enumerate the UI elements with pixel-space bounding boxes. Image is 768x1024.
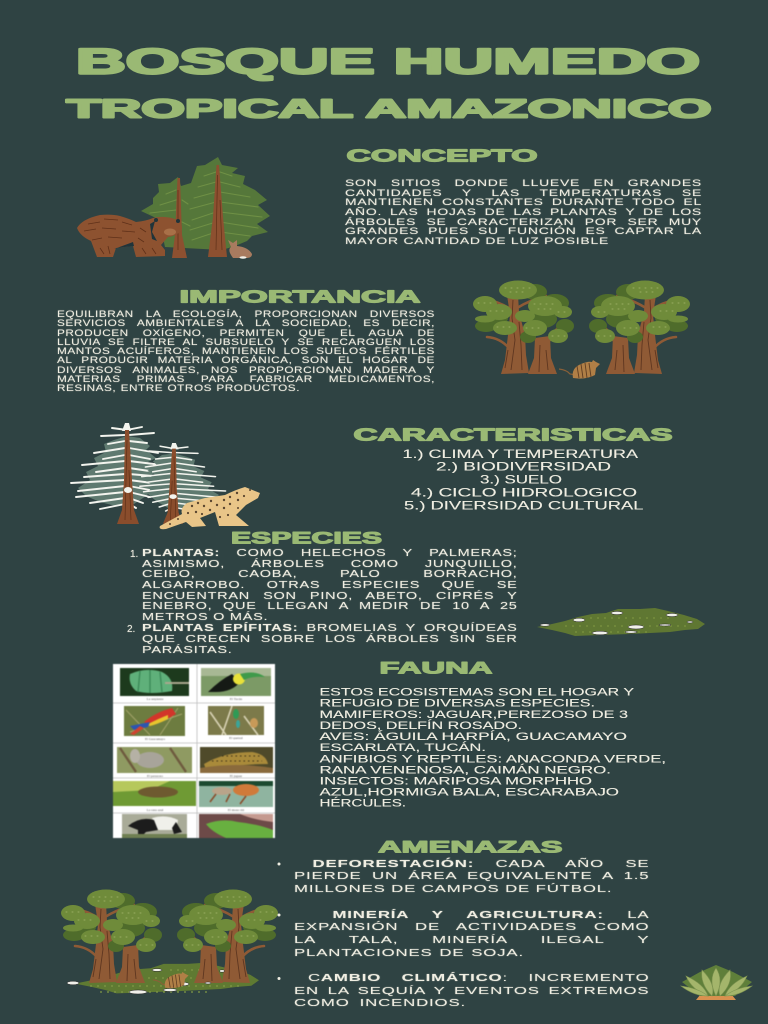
text: amenaza cambio climatico: CAMBIO CLIMÁTICO: INCREMENTO: [308, 973, 649, 984]
text: amenaza deforestacion: PIERDE UN ÁREA EQUIVALENTE A 1.5: [294, 871, 649, 882]
list: caracteristicas: 3.) SUELO: [480, 473, 562, 487]
photo: quetzal: El quetzal: [229, 736, 243, 740]
text: especies item 1: ENCUENTRAN SON PINO, ABETO, CIPRÉS Y: [142, 591, 517, 602]
photo: monkey: [199, 781, 273, 812]
title: BOSQUE HUMEDO: BOSQUE HUMEDO: [76, 42, 700, 82]
text: fauna description: RANA VENENOSA, CAIMÁN NEGRO.: [320, 763, 611, 776]
photo: toucan: El Tucán: [230, 697, 242, 701]
text: fauna description: REFUGIO DE DIVERSAS ESPECIES.: [320, 698, 595, 710]
icon: snowy pines with jaguar: [71, 423, 260, 529]
heading: especies: ESPECIES: [231, 530, 382, 548]
photo: tapir: [122, 814, 187, 838]
text: especies item 1: [142, 548, 517, 623]
list: caracteristicas: 1.) CLIMA Y TEMPERATURA: [402, 447, 638, 461]
text: concepto paragraph: GRANDES PUES SU FUNCIÓN ES CAPTAR LA: [345, 226, 702, 236]
text: amenaza mineria: MINERÍA Y AGRICULTURA: LA: [332, 910, 649, 920]
text: especies item 1: PLANTAS: COMO HELECHOS Y PALMERAS;: [142, 548, 517, 559]
text: concepto paragraph: AÑO. LAS HOJAS DE LAS PLANTAS Y DE LOS: [345, 207, 702, 217]
text: amenaza mineria: PLANTACIONES DE SOJA.: [294, 948, 524, 959]
text: fauna description: INSECTOS: MARIPOSA MORPHHO: [320, 776, 593, 788]
text: importancia paragraph: EQUILIBRAN LA ECOLOGÍA, PROPORCIONAN DIVERSOS: [57, 309, 435, 319]
text: especies item 2: PARÁSITAS.: [142, 645, 232, 656]
list number 1: 1.: [130, 549, 138, 560]
text: especies item 1: ALGARROBO. OTRAS ESPECIES QUE SE: [142, 580, 517, 591]
photo: macaw: El Guacamayo: [145, 737, 165, 741]
icon: broadleaf trees with armadillo: [473, 280, 690, 379]
text: fauna description: MAMIFEROS: JAGUAR,PEREZOSO DE 3: [320, 709, 628, 721]
text: importancia paragraph: RESINAS, ENTRE OTROS PRODUCTOS.: [57, 383, 300, 393]
photo: caterpillar: [120, 668, 189, 701]
text: fauna description: AZUL,HORMIGA BALA, ESCARABAJO: [320, 787, 620, 799]
text: fauna description: HÉRCULES.: [320, 797, 406, 810]
text: concepto paragraph: [344, 178, 702, 246]
photo: sloth: El perezoso: [147, 774, 163, 778]
text: importancia paragraph: MANTOS ACUÍFEROS, MANTIENEN LOS SUELOS FÉRTILES: [57, 346, 435, 356]
text: fauna description: ANFIBIOS Y REPTILES: ANACONDA VERDE,: [320, 753, 666, 765]
list: caracteristicas: [402, 447, 644, 512]
list number 2: 2.: [127, 624, 135, 635]
icon: trees on moss with armadillo: [61, 890, 278, 994]
text: amenaza cambio climatico: [294, 971, 649, 1009]
text: especies item 2: [142, 622, 517, 656]
heading: concepto: CONCEPTO: [346, 146, 538, 166]
text: importancia paragraph: [56, 308, 435, 393]
text: especies item 1: ENEBRO, QUE LLEGAN A MEDIR DE 10 A 25: [142, 601, 517, 612]
photo: iguana: [199, 814, 273, 838]
text: especies item 1: ASIMISMO, ÁRBOLES COMO JUNQUILLO,: [142, 559, 517, 570]
list: caracteristicas: 5.) DIVERSIDAD CULTURAL: [404, 498, 644, 512]
photo: frog: [113, 781, 196, 812]
icon: agave plant: [681, 965, 752, 1000]
heading: amenazas: AMENAZAS: [378, 839, 562, 857]
text: especies item 1: METROS O MÁS.: [142, 612, 268, 623]
text: amenaza cambio climatico: COMO INCENDIOS.: [294, 998, 466, 1009]
text: amenaza cambio climatico: EN LA SEQUÍA Y EVENTOS EXTREMOS: [294, 986, 649, 997]
text: fauna description: ESTOS ECOSISTEMAS SON EL HOGAR Y: [320, 687, 635, 699]
text: concepto paragraph: SON SITIOS DONDE LLUEVE EN GRANDES: [345, 178, 702, 188]
subtitle: TROPICAL AMAZONICO: TROPICAL AMAZONICO: [66, 94, 712, 124]
photo: caterpillar: La serpiente: [147, 697, 164, 701]
text: especies item 2: QUE CRECEN SOBRE LOS ÁRBOLES SIN SER: [142, 634, 517, 645]
text: amenaza deforestacion: MILLONES DE CAMPOS DE FÚTBOL.: [294, 884, 612, 895]
text: amenaza mineria: LA TALA, MINERÍA ILEGAL Y: [294, 935, 649, 946]
photo: macaw: [124, 706, 185, 741]
photo: sloth: [117, 747, 192, 778]
heading: importancia: IMPORTANCIA: [180, 286, 421, 306]
heading: caracteristicas: CARACTERISTICAS: [354, 424, 672, 444]
photo: monkey: El mono tití: [228, 808, 244, 812]
text: amenaza deforestacion: DEFORESTACIÓN: CADA AÑO SE: [312, 858, 649, 870]
text: importancia paragraph: AL PRODUCIR MATERIA ORGÁNICA, SON EL HOGAR DE: [57, 355, 435, 365]
text: importancia paragraph: DIVERSOS ANIMALES, NOS PROPORCIONAN MADERA Y: [57, 365, 435, 375]
text: importancia paragraph: MATERIAS PRIMAS PARA FABRICAR MEDICAMENTOS,: [57, 374, 435, 384]
list: caracteristicas: 4.) CICLO HIDROLOGICO: [411, 486, 637, 500]
text: especies item 2: PLANTAS EPÍFITAS: BROMELIAS Y ORQUÍDEAS: [142, 623, 517, 634]
text: importancia paragraph: LLUVIA SE FILTRE AL SUBSUELO Y SE RECARGUEN LOS: [57, 337, 435, 347]
list: caracteristicas: 2.) BIODIVERSIDAD: [436, 460, 612, 474]
text: amenaza mineria: [294, 908, 649, 959]
photo: toucan: [201, 668, 271, 701]
text: concepto paragraph: MAYOR CANTIDAD DE LUZ POSIBLE: [345, 236, 609, 246]
text: fauna description: DEDOS, DELFÍN ROSADO.: [320, 719, 522, 732]
photo panel: fauna species grid: [113, 664, 275, 838]
text: amenaza mineria: EXPANSIÓN DE ACTIVIDADES COMO: [294, 922, 649, 933]
photo: jaguar: El jaguar: [230, 774, 243, 778]
text: fauna description: AVES: ÁGUILA HARPÍA, GUACAMAYO: [320, 730, 628, 743]
text: concepto paragraph: ÁRBOLES SE CARACTERIZAN POR SER MUY: [345, 217, 702, 227]
text: fauna description: ESCARLATA, TUCÁN.: [320, 741, 486, 754]
bullets: amenazas: [278, 862, 280, 980]
text: importancia paragraph: PRODUCEN OXÍGENO, PERMITEN QUE EL AGUA DE: [57, 328, 435, 338]
icon: pines with bear and rabbit: [77, 157, 270, 259]
icon: moss patch: [537, 608, 705, 636]
photo: jaguar: [200, 747, 273, 778]
text: concepto paragraph: CANTIDADES Y LAS TEMPERATURAS SE: [345, 188, 702, 198]
text: especies item 1: CEIBO, CAOBA, PALO BORRACHO,: [142, 569, 517, 580]
text: amenaza deforestacion: [294, 857, 649, 895]
photo: quetzal: [208, 706, 264, 740]
text: importancia paragraph: SERVICIOS AMBIENTALES A LA SOCIEDAD, ES DECIR,: [57, 318, 435, 328]
heading: fauna: FAUNA: [380, 660, 493, 678]
photo: frog: La rana azul: [147, 808, 163, 812]
text: fauna description: [320, 687, 666, 810]
text: concepto paragraph: MANTIENEN CONSTANTES DURANTE TODO EL: [345, 197, 702, 207]
